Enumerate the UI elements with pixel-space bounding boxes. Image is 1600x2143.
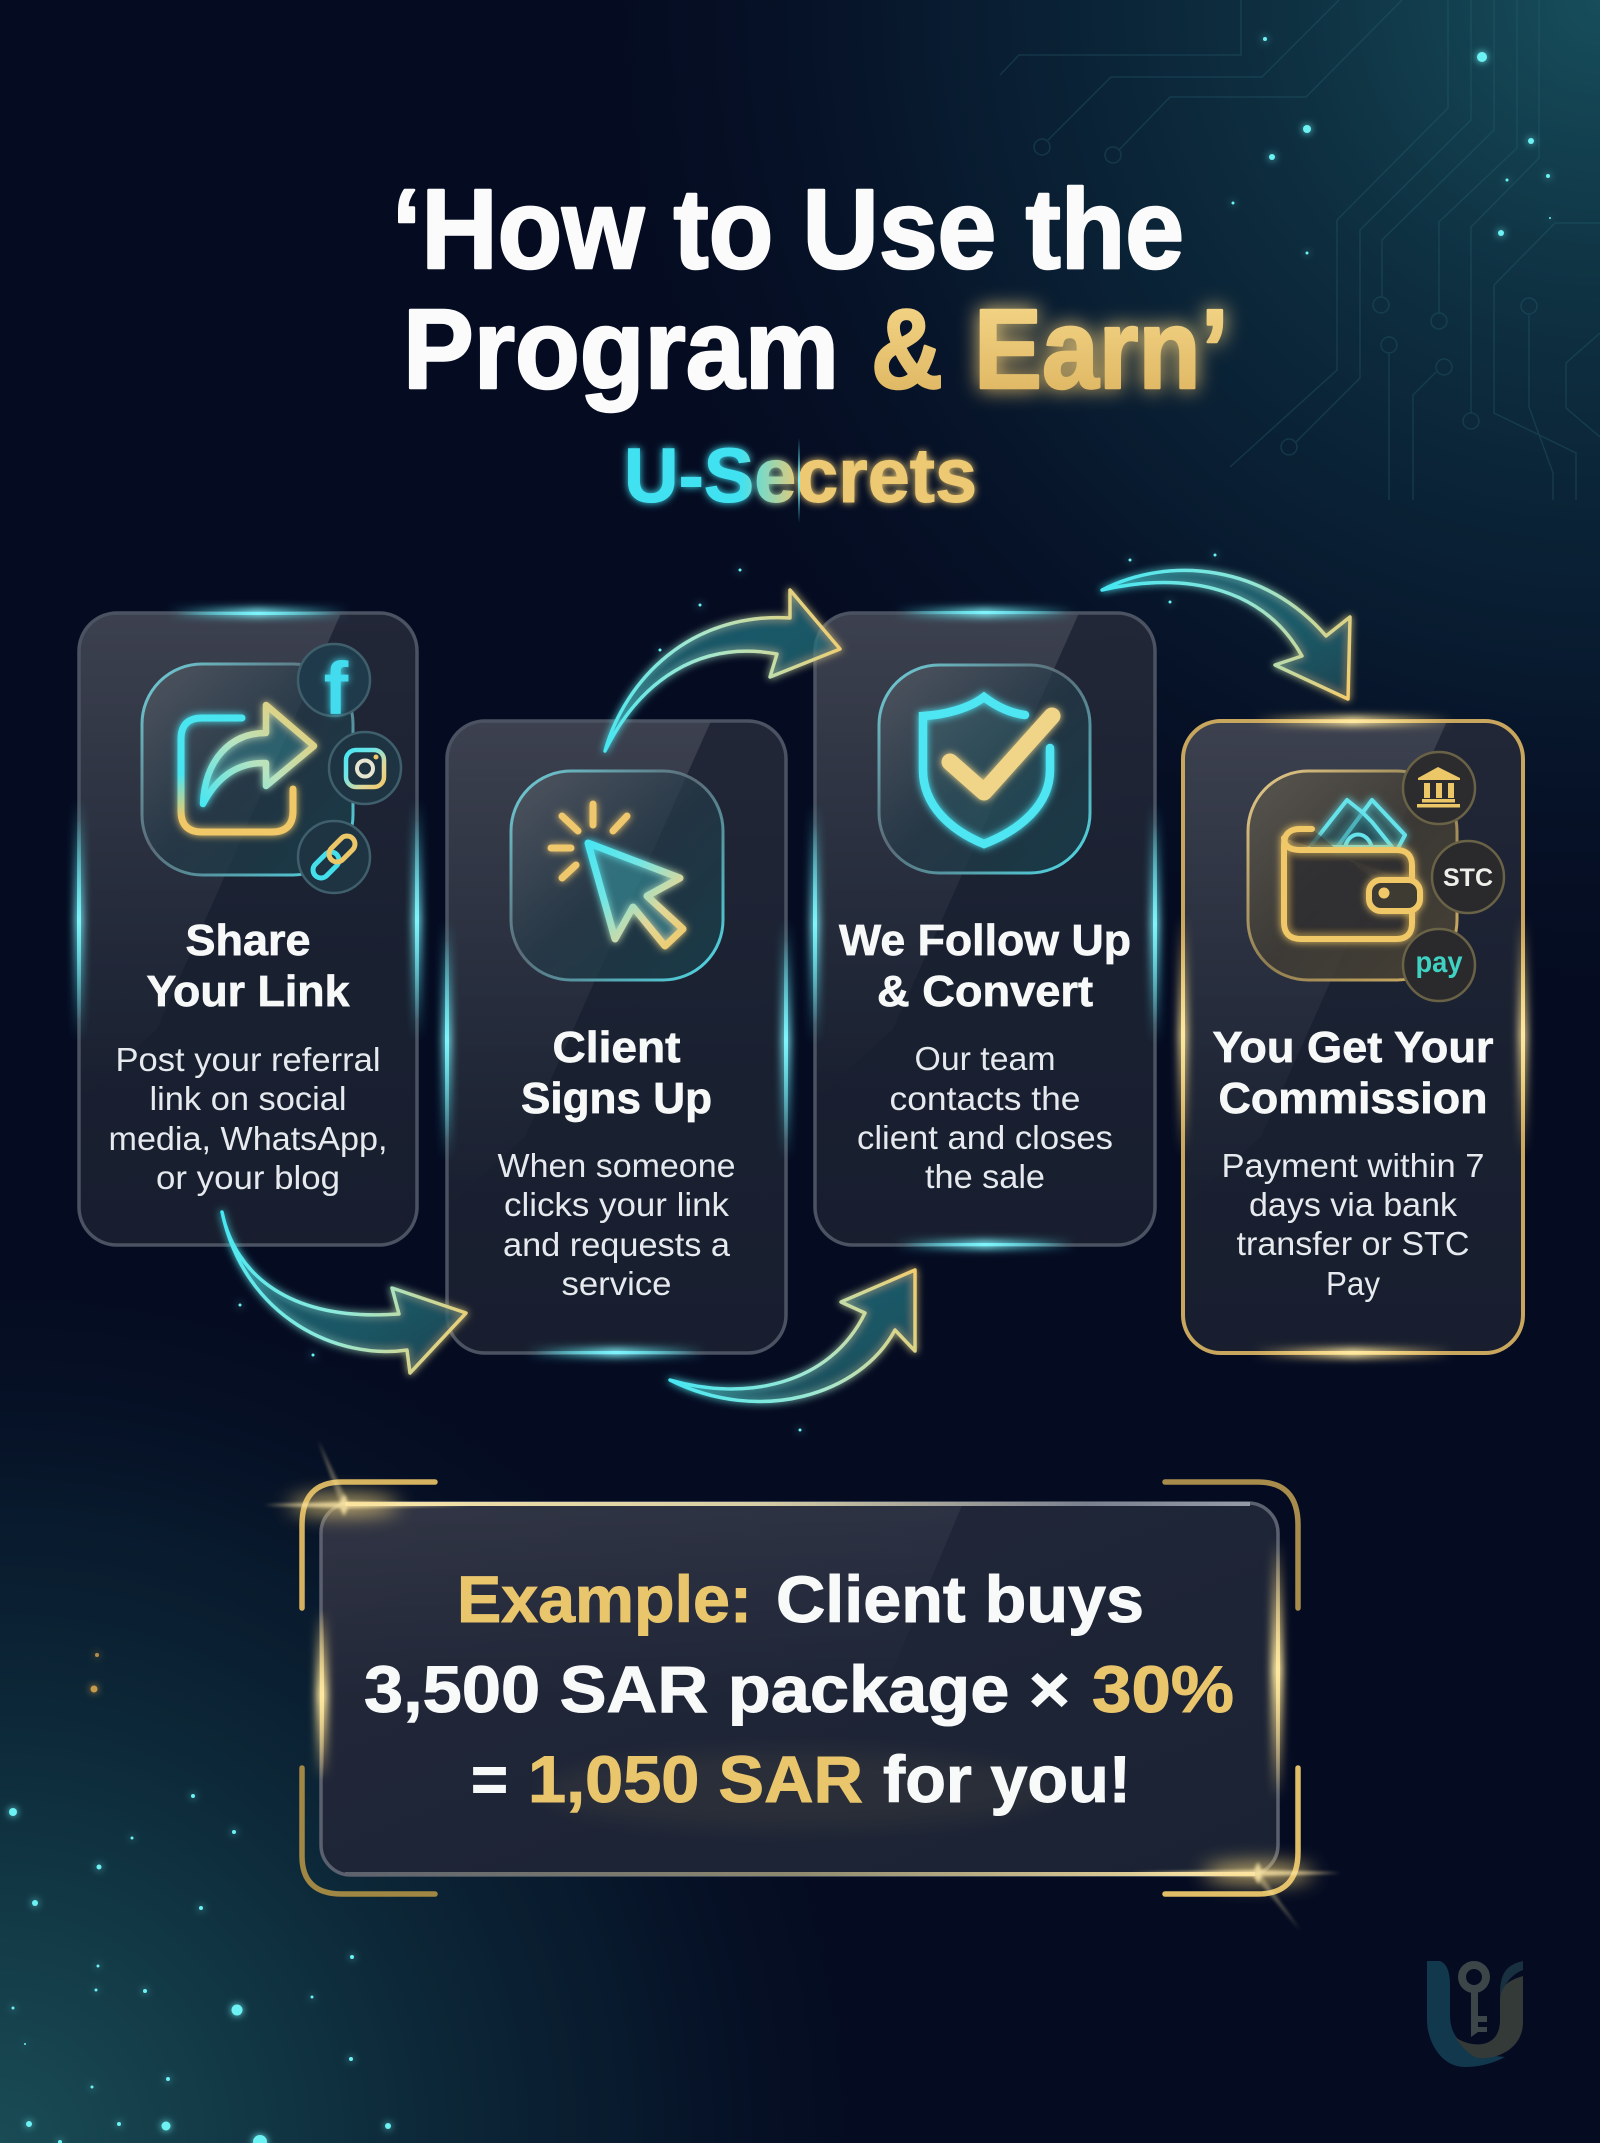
example callout panel (264, 1440, 1340, 1930)
icon: facebook (298, 644, 370, 730)
heading (521, 1023, 712, 1123)
description: Pay (1326, 1265, 1380, 1302)
description: contacts the (890, 1080, 1080, 1117)
heading: You Get Your (1212, 1023, 1494, 1072)
icon tile: shield check (879, 665, 1090, 873)
icon: STC: STC (1443, 864, 1493, 892)
logo: U with key (1427, 1961, 1523, 2067)
description (108, 1041, 388, 1196)
description: the sale (925, 1158, 1045, 1195)
heading (1212, 1023, 1494, 1123)
description: and requests a (503, 1226, 731, 1263)
heading: Your Link (146, 967, 350, 1016)
description: or your blog (156, 1159, 340, 1196)
arrow: card 3 to card 4 (1102, 570, 1350, 699)
example text: Example: (457, 1562, 752, 1636)
icon: facebook: f (324, 647, 349, 730)
title: & (871, 286, 943, 412)
heading (146, 916, 350, 1016)
heading: Signs Up (521, 1074, 712, 1123)
brand name: U-Secrets: U-Secrets (624, 433, 977, 519)
heading (839, 916, 1131, 1016)
arrow: card 1 to card 2 (222, 1212, 466, 1373)
description: transfer or STC (1236, 1225, 1470, 1262)
example text: Client buys (776, 1562, 1144, 1636)
description: days via bank (1249, 1186, 1458, 1223)
title: Program (403, 286, 839, 412)
circuit lines top right (1000, 0, 1600, 500)
description (498, 1147, 736, 1302)
icon: pay: pay (1416, 946, 1463, 979)
icon tile: wallet (1248, 771, 1457, 980)
example text: 3,500 SAR package × (364, 1652, 1070, 1726)
description: service (562, 1265, 672, 1302)
icon tile: share (142, 664, 353, 875)
icon: STC (1432, 841, 1504, 913)
heading: We Follow Up (839, 916, 1131, 965)
description: Our team (914, 1040, 1056, 1077)
description (857, 1040, 1113, 1195)
title (392, 166, 1229, 412)
card 1: share your link (74, 608, 422, 1245)
title: ‘How to Use the (392, 166, 1184, 292)
heading: Commission (1218, 1074, 1488, 1123)
description: client and closes (857, 1119, 1113, 1156)
icon: pay (1403, 929, 1475, 1001)
card 3: we follow up and convert (810, 608, 1160, 1249)
description: Post your referral (116, 1041, 380, 1078)
example text: for you! (883, 1742, 1131, 1816)
heading: Client (552, 1023, 681, 1072)
card 2: client signs up (442, 721, 791, 1357)
gold flares (264, 1440, 1340, 1930)
title: Earn’ (974, 286, 1229, 412)
heading: & Convert (877, 967, 1093, 1016)
arrow: card 2 to card 3 (605, 590, 840, 751)
icon: instagram (329, 732, 401, 804)
example text: = (471, 1742, 508, 1816)
description: media, WhatsApp, (108, 1120, 388, 1157)
heading: Share (186, 916, 310, 965)
card 4: you get your commission (1178, 716, 1528, 1358)
description: When someone (498, 1147, 736, 1184)
description: clicks your link (504, 1186, 730, 1223)
example text (364, 1562, 1234, 1816)
icon: bank (1403, 752, 1475, 824)
arrow: card 2 bottom to card 3 bottom (670, 1270, 915, 1401)
example text: 1,050 SAR (528, 1742, 863, 1816)
gold corner brackets (302, 1482, 1298, 1894)
description (1222, 1147, 1484, 1302)
icon tile: cursor click (511, 771, 723, 980)
description: link on social (150, 1080, 346, 1117)
example text: 30% (1092, 1652, 1234, 1726)
icon: link (298, 821, 370, 893)
description: Payment within 7 (1222, 1147, 1484, 1184)
